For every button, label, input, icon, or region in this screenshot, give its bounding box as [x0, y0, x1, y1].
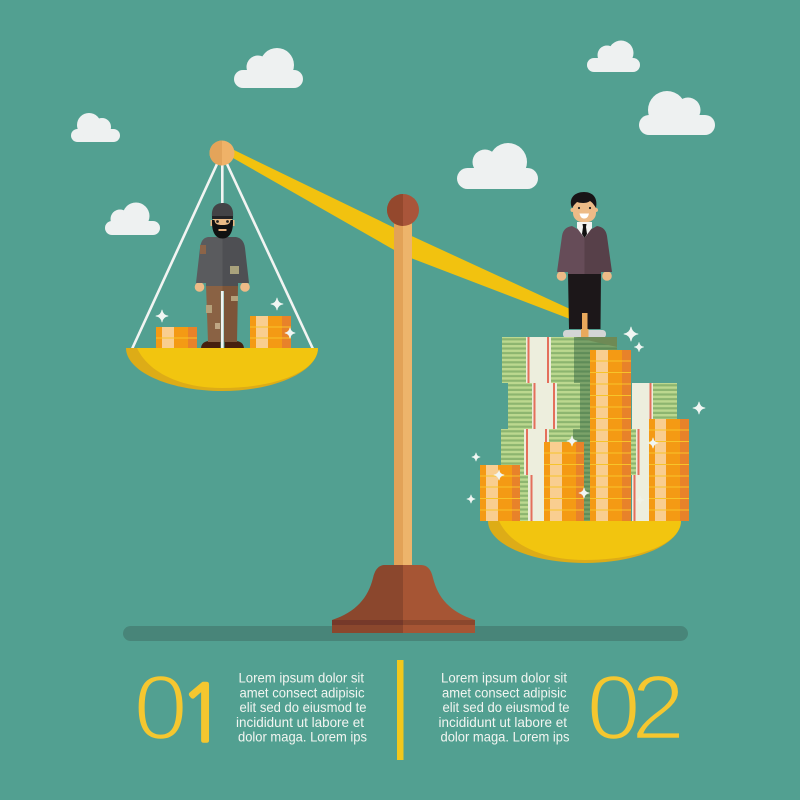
poor man [195, 203, 250, 349]
cloud 4 [639, 91, 715, 135]
coin stack 3 [590, 350, 631, 521]
scale pivot knob [387, 194, 419, 226]
shirt and tie [577, 222, 592, 238]
hands [195, 282, 204, 292]
coin stack right [250, 316, 291, 349]
rich man [557, 192, 612, 338]
cloud 2 [71, 113, 120, 142]
text block right: elit sed do eiusmod te [442, 699, 570, 715]
number 02 [586, 657, 685, 759]
text block right [438, 670, 570, 744]
coin stack 1 [480, 465, 520, 521]
centre divider [397, 660, 404, 760]
pan ropes [132, 160, 313, 349]
bundle right lower [630, 429, 649, 521]
hair [571, 192, 596, 208]
text block right: dolor maga. Lorem ips [440, 728, 570, 744]
text block left: amet consect adipisic [240, 684, 364, 700]
support peg [581, 310, 588, 338]
trousers [206, 285, 222, 342]
cloud 3 [587, 40, 640, 72]
hat [212, 203, 233, 217]
number 01: 0 [134, 657, 188, 759]
right pan [488, 521, 681, 563]
hands [557, 271, 566, 281]
bundle second row right [632, 383, 677, 429]
text block right: incididunt ut labore et [438, 714, 567, 730]
text block left: dolor maga. Lorem ips [238, 728, 367, 744]
text block left [236, 670, 367, 744]
text block right: amet consect adipisic [442, 684, 566, 700]
text block left: incididunt ut labore et [236, 714, 364, 730]
text block left: elit sed do eiusmod te [240, 699, 367, 715]
boots [201, 341, 244, 349]
text block right: Lorem ipsum dolor sit [441, 670, 567, 686]
bundle top row [502, 337, 617, 383]
scale beam [233, 150, 570, 319]
coin stack 4 [649, 419, 689, 521]
bundle third row [501, 429, 590, 475]
number 01: 1 [179, 676, 226, 754]
head [573, 199, 596, 222]
number 02: 2 [631, 657, 685, 759]
cloud 1 [234, 48, 303, 88]
ground bar [123, 626, 688, 641]
head [213, 214, 232, 232]
trousers [568, 273, 601, 329]
scale post [394, 222, 412, 568]
left pan [126, 348, 318, 391]
coin stack 2 [544, 442, 584, 521]
left hanger knob [210, 140, 234, 166]
cloud 5 [457, 143, 538, 189]
torso [196, 237, 222, 286]
scale base [332, 565, 475, 633]
text block left: Lorem ipsum dolor sit [238, 670, 364, 686]
jacket [557, 226, 584, 274]
cloud 6 [105, 202, 160, 235]
bundle bottom row [520, 475, 590, 521]
sparkles [156, 298, 705, 504]
left pan group: poor man [126, 160, 318, 391]
shoes [563, 330, 606, 338]
money and coin pile [480, 337, 689, 521]
coin stack left [156, 327, 197, 349]
number 02: 0 [586, 657, 641, 759]
bundle second row left [508, 383, 590, 429]
number 01 [134, 657, 226, 759]
